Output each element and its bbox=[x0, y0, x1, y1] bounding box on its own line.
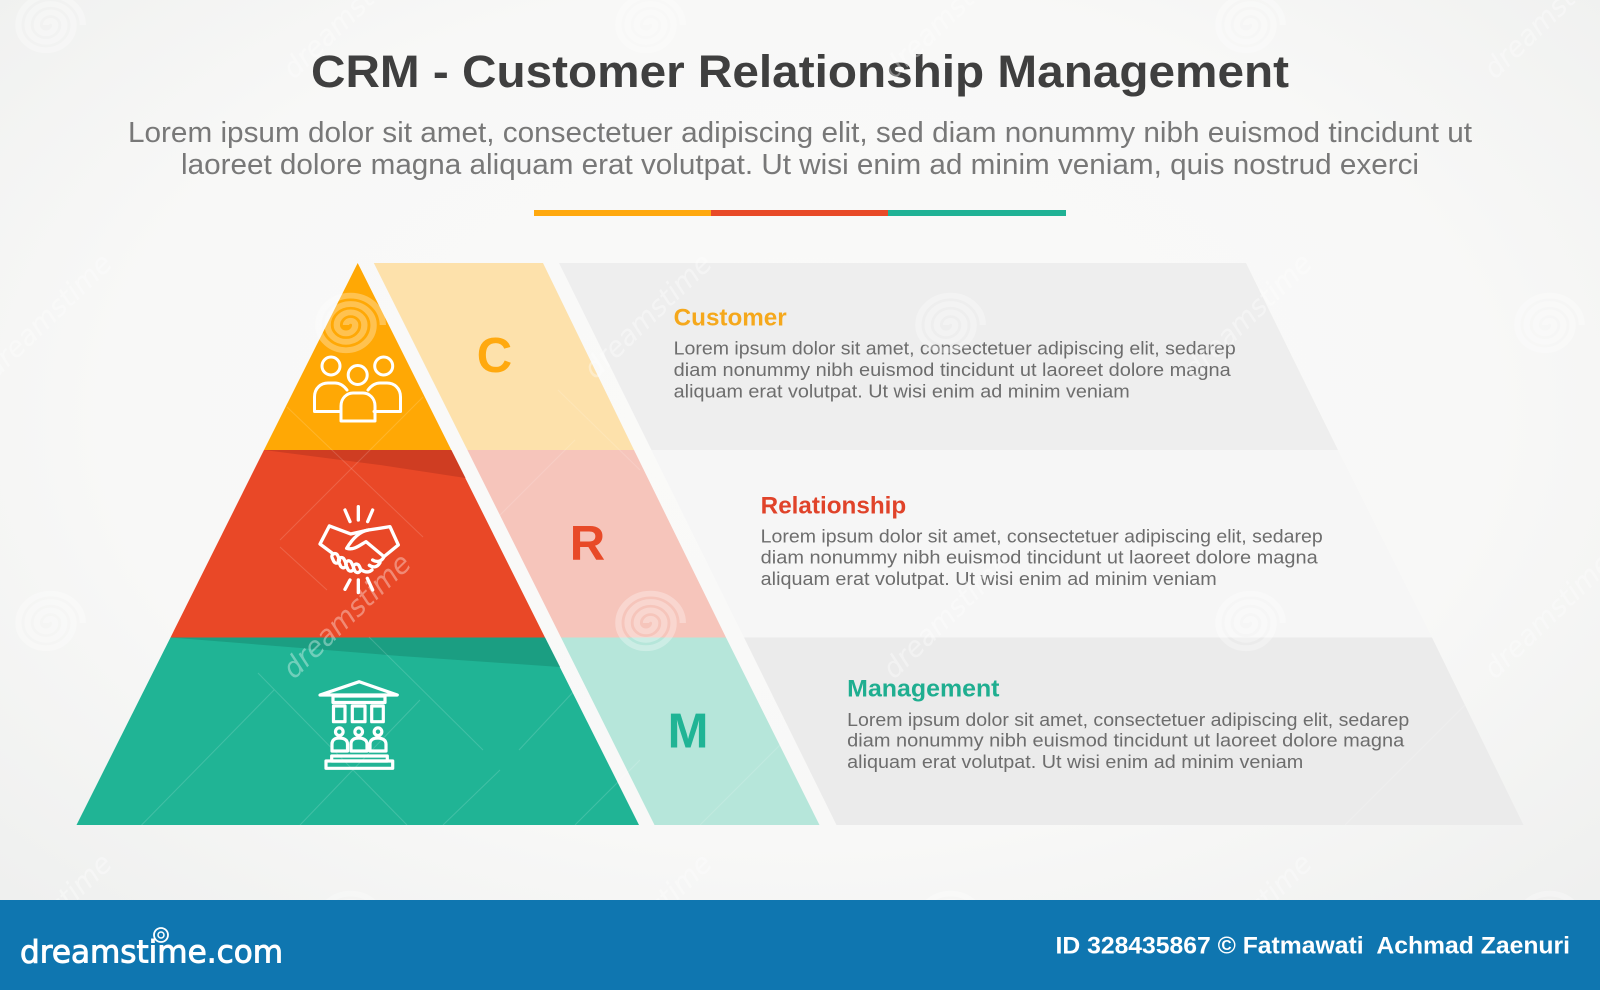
tricolour divider bar bbox=[534, 210, 1066, 216]
subtitle text block: Lorem ipsum dolor sit amet, consectetuer adipiscing elit, sed diam nonummy nibh euismod tincidunt ut bbox=[128, 117, 1472, 149]
text block: Customer: Lorem ipsum dolor sit amet, consectetuer adipiscing elit, sedarep bbox=[674, 337, 1236, 358]
watermark diagonal text: dreamstime bbox=[577, 847, 719, 985]
text block: Management: diam nonummy nibh euismod tincidunt ut laoreet dolore magna bbox=[847, 730, 1405, 751]
watermark diagonal text: dreamstime bbox=[577, 247, 719, 385]
footer logo: dreamstime.com bbox=[20, 935, 283, 971]
text block: Customer: diam nonummy nibh euismod tincidunt ut laoreet dolore magna bbox=[674, 359, 1231, 380]
watermark diagonal text: dreamstime bbox=[1177, 247, 1319, 385]
text block: Customer: aliquam erat volutpat. Ut wisi enim ad minim veniam bbox=[674, 380, 1130, 401]
icon: handshake bbox=[320, 507, 398, 593]
letter M: M bbox=[668, 704, 708, 758]
text block: Relationship: aliquam erat volutpat. Ut wisi enim ad minim veniam bbox=[761, 568, 1217, 589]
text block: Management: Lorem ipsum dolor sit amet, consectetuer adipiscing elit, sedarep bbox=[847, 709, 1409, 730]
text block: Customer: Customer bbox=[674, 305, 787, 332]
icon: institution with people bbox=[320, 682, 397, 768]
watermark diagonal text: dreamstime bbox=[876, 547, 1018, 685]
text block: Management bbox=[847, 676, 1409, 772]
watermark diagonal text: dreamstime bbox=[276, 547, 418, 685]
subtitle text block bbox=[128, 117, 1472, 181]
panel: grey description band bbox=[559, 263, 1524, 825]
panel: letter band bbox=[374, 263, 820, 825]
text block: Relationship: diam nonummy nibh euismod tincidunt ut laoreet dolore magna bbox=[761, 546, 1318, 567]
icon: customers group bbox=[314, 357, 400, 421]
subtitle text block: laoreet dolore magna aliquam erat volutpat. Ut wisi enim ad minim veniam, quis nostrud exerci bbox=[181, 149, 1419, 181]
decorative thin lines bbox=[142, 390, 1465, 825]
letter C: C bbox=[477, 329, 512, 383]
text block: Customer bbox=[674, 305, 1236, 401]
footer banner bbox=[0, 900, 1600, 990]
title: CRM - Customer Relationship Management bbox=[311, 46, 1289, 97]
text block: Management: aliquam erat volutpat. Ut wisi enim ad minim veniam bbox=[847, 751, 1303, 772]
text block: Relationship: Relationship bbox=[761, 492, 906, 519]
text block: Management: Management bbox=[847, 676, 1000, 703]
watermark diagonal text: dreamstime bbox=[1177, 847, 1319, 985]
letter R: R bbox=[570, 517, 605, 571]
text block: Relationship: Lorem ipsum dolor sit amet, consectetuer adipiscing elit, sedarep bbox=[761, 525, 1323, 546]
text block: Relationship bbox=[761, 492, 1323, 589]
panel: coloured pyramid bbox=[76, 263, 639, 825]
footer credit: ID 328435867 © Fatmawati Achmad Zaenuri bbox=[1056, 932, 1570, 959]
